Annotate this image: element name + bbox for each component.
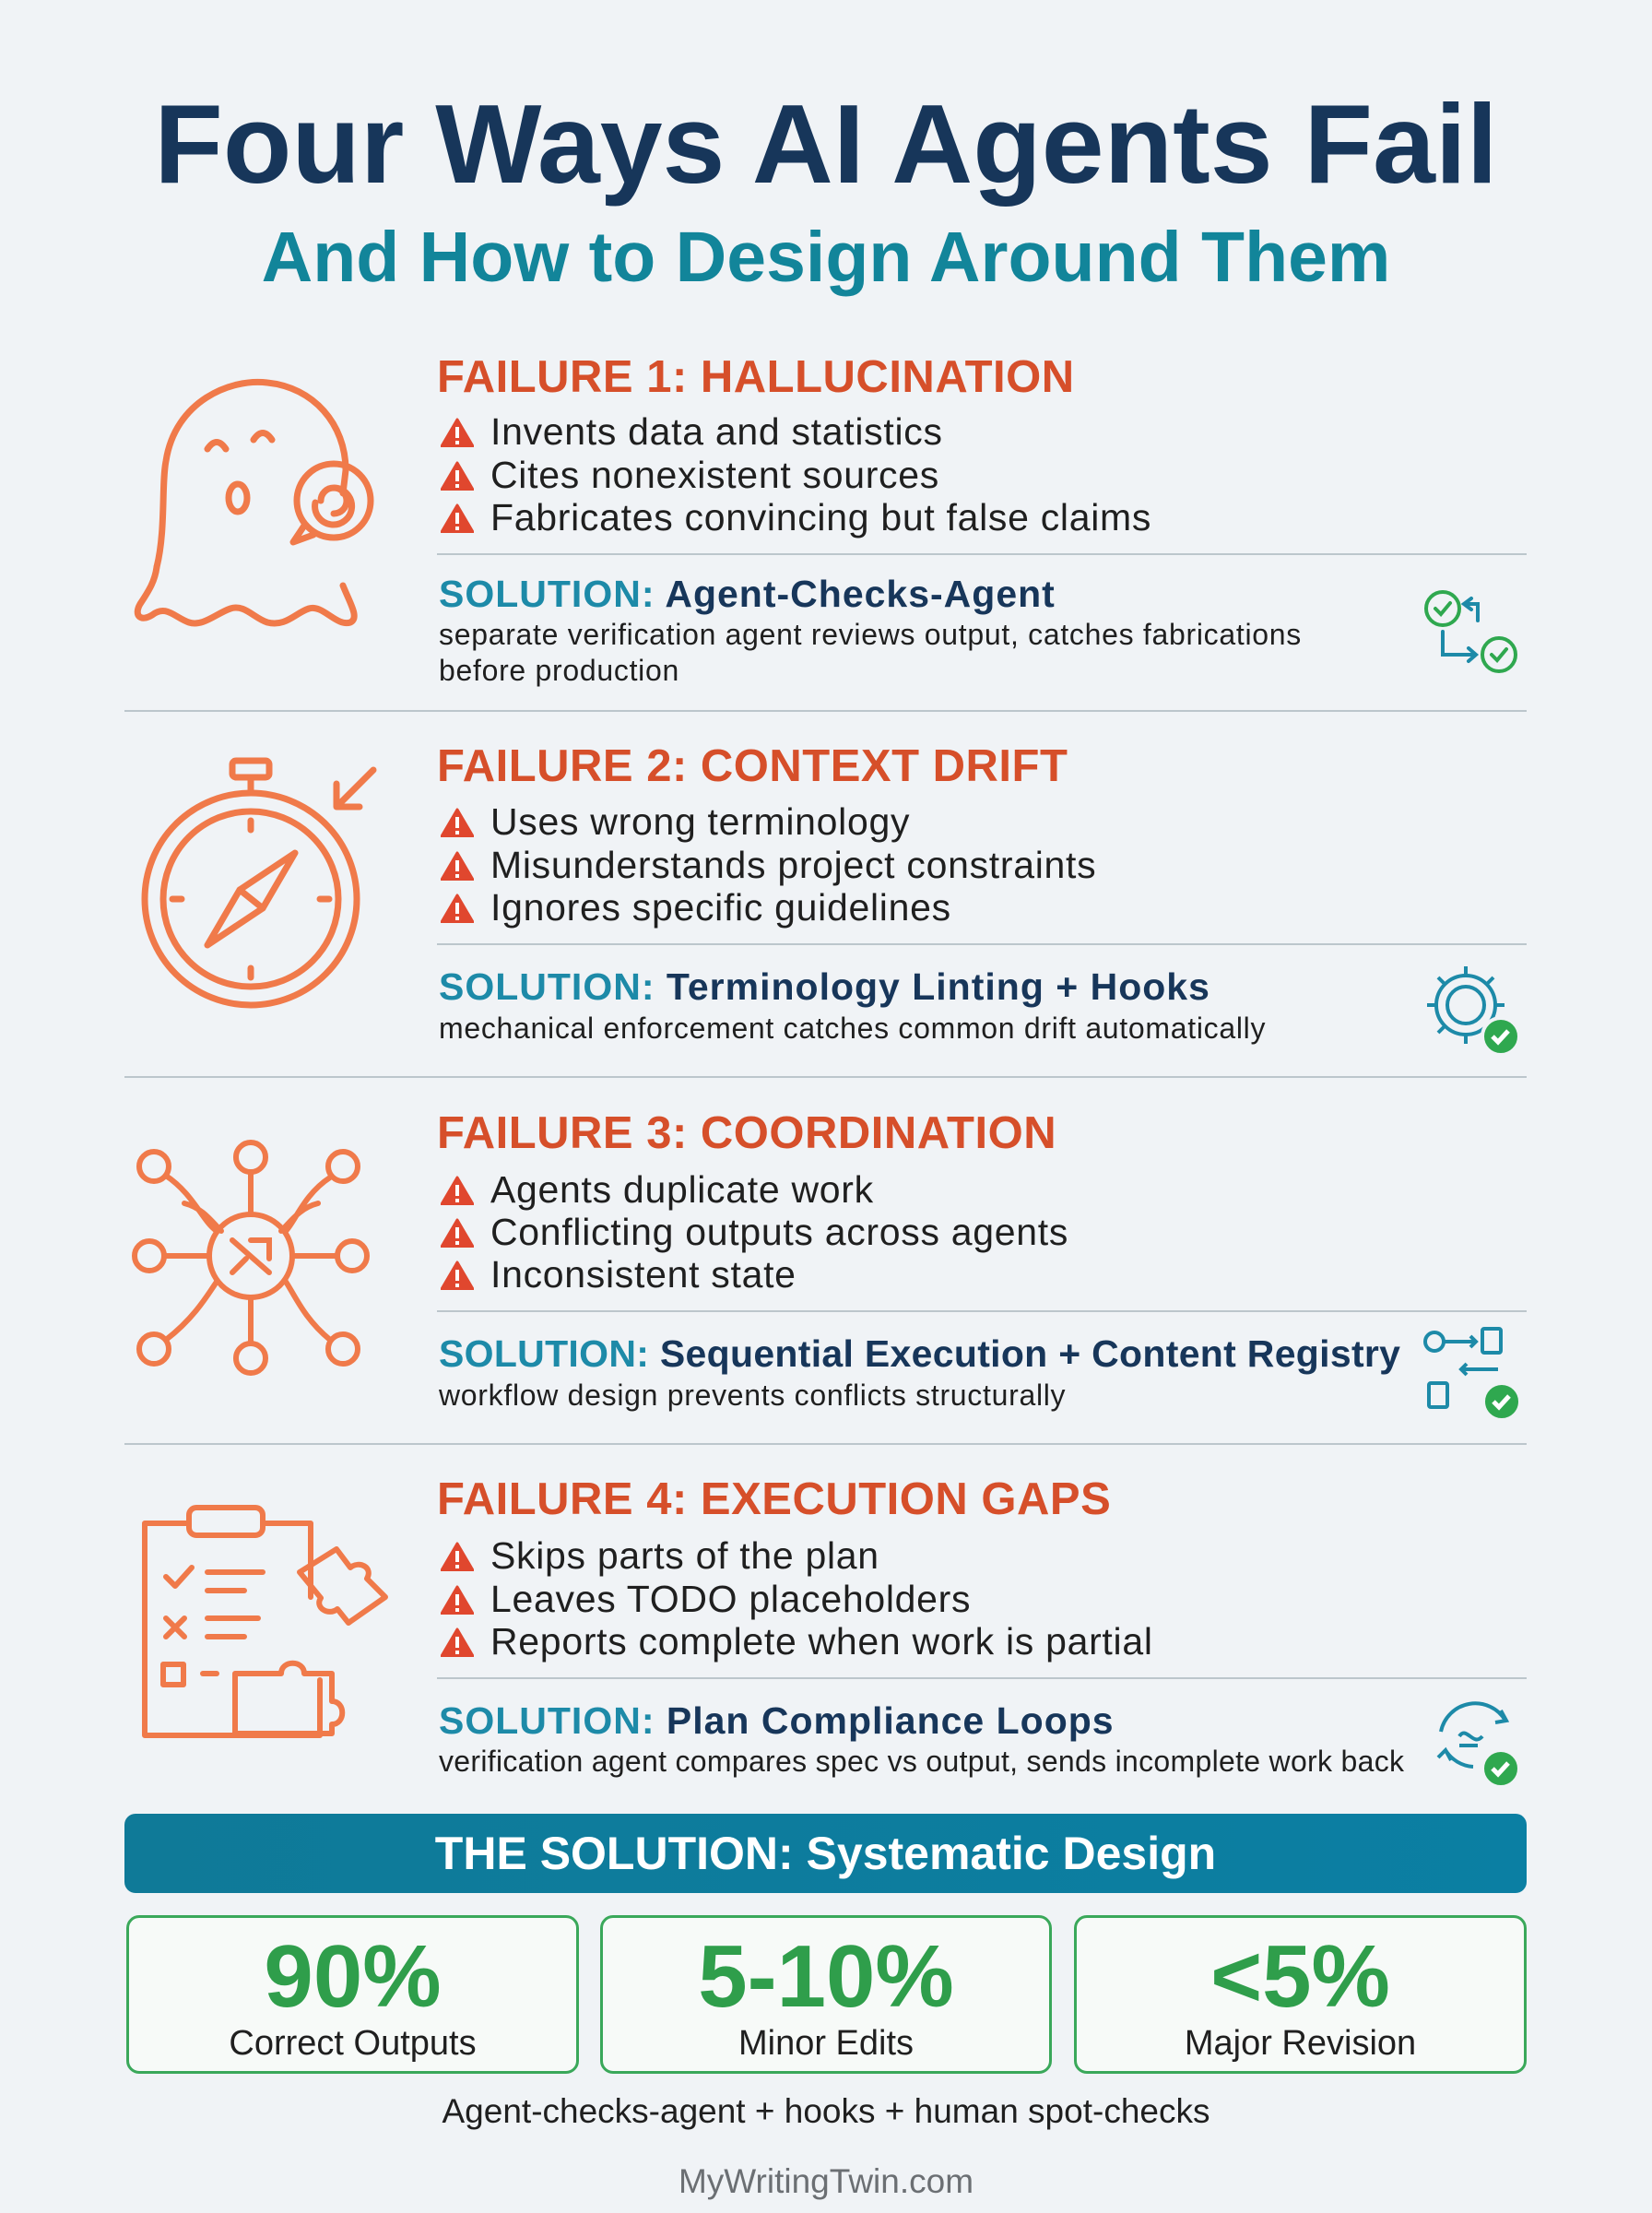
solution 2: SOLUTION: Terminology Linting + Hooks	[439, 965, 1210, 1008]
banner: systematic design	[124, 1814, 1527, 1893]
text: Inconsistent state	[490, 1253, 796, 1296]
subtitle: And How to Design Around Them	[262, 218, 1390, 297]
icon: compliance loop	[1436, 1701, 1517, 1785]
failure 2 bullets	[441, 800, 1096, 929]
text: Conflicting outputs across agents	[490, 1211, 1068, 1253]
text: mechanical enforcement catches common drift automatically	[439, 1012, 1266, 1045]
stat: 5-10%: 5-10%	[698, 1927, 954, 2026]
stat: 5-10%	[600, 1915, 1052, 2074]
solution 1: SOLUTION: Agent-Checks-Agent	[439, 573, 1056, 615]
stat: <5%: Major Revision	[1185, 2024, 1416, 2063]
text: verification agent compares spec vs output, sends incomplete work back	[439, 1745, 1404, 1778]
text: Uses wrong terminology	[490, 800, 910, 843]
text: workflow design prevents conflicts structurally	[439, 1379, 1066, 1412]
text: before production	[439, 654, 679, 687]
footer note: Agent-checks-agent + hooks + human spot-checks	[442, 2092, 1210, 2130]
stat: 5-10%: Minor Edits	[738, 2024, 914, 2063]
failure 4 bullets	[441, 1534, 1153, 1663]
failure 1 bullets	[441, 410, 1151, 538]
stat: <5%: <5%	[1210, 1927, 1390, 2026]
site credit: MyWritingTwin.com	[678, 2162, 974, 2200]
text: Reports complete when work is partial	[490, 1620, 1153, 1663]
banner: systematic design: THE SOLUTION: Systematic Design	[435, 1828, 1216, 1879]
text: Ignores specific guidelines	[490, 886, 951, 929]
text: Cites nonexistent sources	[490, 454, 939, 496]
icon: network	[132, 1140, 370, 1376]
failure 1 heading: FAILURE 1: HALLUCINATION	[437, 352, 1075, 402]
text: Agents duplicate work	[490, 1168, 874, 1211]
icon: ghost	[135, 378, 374, 627]
icon: check loop	[1424, 590, 1517, 673]
icon: clipboard puzzle	[142, 1505, 388, 1738]
failure 4 heading: FAILURE 4: EXECUTION GAPS	[437, 1474, 1111, 1524]
text: Invents data and statistics	[490, 410, 943, 453]
stat: 90%: 90%	[264, 1927, 442, 2026]
text: Skips parts of the plan	[490, 1534, 879, 1577]
text: separate verification agent reviews output, catches fabrications	[439, 618, 1302, 651]
failure 2 heading: FAILURE 2: CONTEXT DRIFT	[437, 741, 1068, 791]
icon: gear check	[1427, 966, 1517, 1053]
failure 3 bullets	[441, 1168, 1068, 1296]
failure 3 heading: FAILURE 3: COORDINATION	[437, 1108, 1056, 1158]
text: Misunderstands project constraints	[490, 844, 1096, 886]
text: Leaves TODO placeholders	[490, 1578, 971, 1620]
stat: 90%	[126, 1915, 579, 2074]
stat: <5%	[1074, 1915, 1527, 2074]
stat: 90%: Correct Outputs	[229, 2024, 477, 2063]
solution 3: SOLUTION: Sequential Execution + Content Registry	[439, 1332, 1400, 1375]
text: Fabricates convincing but false claims	[490, 496, 1151, 538]
title: Four Ways AI Agents Fail	[154, 81, 1498, 207]
solution 4: SOLUTION: Plan Compliance Loops	[439, 1699, 1115, 1742]
icon: sequence docs	[1423, 1327, 1518, 1418]
icon: compass stopwatch	[142, 758, 376, 1009]
